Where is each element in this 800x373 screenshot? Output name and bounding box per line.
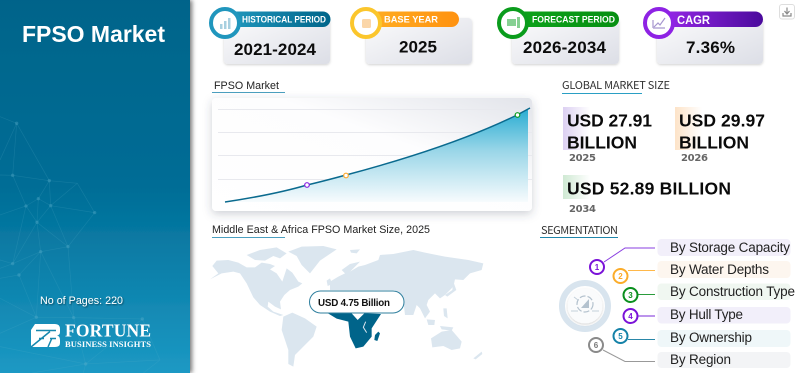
map: world (210, 246, 483, 367)
heading: FPSO Market: FPSO Market (214, 80, 279, 92)
stat: 2034 market size: USD 52.89 BILLION (567, 178, 731, 198)
stat: 2025 market size: 2025 (569, 153, 596, 164)
stat: forecast period: FORECAST PERIOD (532, 14, 615, 26)
stat: base year: 2025 (399, 38, 437, 56)
stat: 2026 market size: BILLION (679, 132, 749, 152)
map highlight: Middle East & Africa (328, 313, 381, 348)
panel: sidebar (0, 0, 190, 373)
stat: 2025 market size: BILLION (567, 132, 637, 152)
segment 2: By Water Depths: 2 (618, 272, 623, 281)
stat: 2034 market size: 2034 (569, 204, 596, 215)
wordmark: BUSINESS INSIGHTS (65, 339, 151, 349)
segment 6: By Region: 6 (594, 341, 599, 350)
trend line (225, 108, 530, 202)
segment 5: By Ownership: 5 (618, 332, 623, 341)
stat: 2034 market size (563, 175, 731, 215)
segment 5: By Ownership: By Ownership (670, 330, 752, 345)
segment 2: By Water Depths (614, 261, 790, 283)
segment 4: By Hull Type (624, 307, 790, 324)
segment 1: By Storage Capacity: By Storage Capacity (670, 240, 790, 255)
wordmark (65, 320, 151, 349)
segment 3: By Construction Type: By Construction Type (670, 284, 795, 299)
segment 3: By Construction Type (624, 284, 795, 302)
data point: 2034 (515, 113, 520, 117)
wordmark: FORTUNE (65, 320, 151, 340)
icon: segmentation hub (562, 283, 608, 329)
stat: CAGR: 7.36% (686, 38, 735, 57)
stat: 2025 market size: USD 27.91 (567, 110, 652, 130)
heading: Middle East & Africa: Middle East & Africa FPSO Market Size, 2025 (212, 224, 430, 236)
segment 6: By Region (589, 338, 790, 368)
area fill (225, 109, 528, 202)
heading: segmentation: SEGMENTATION (541, 222, 618, 238)
icon: FB logo mark (31, 324, 60, 347)
stat: 2025 market size (563, 107, 652, 164)
stat: forecast period: 2026-2034 (523, 38, 607, 57)
segment 1: By Storage Capacity: 1 (595, 263, 600, 272)
segment 4: By Hull Type: By Hull Type (670, 307, 743, 322)
stat: 2026 market size: USD 29.97 (679, 110, 765, 130)
segment 6: By Region: By Region (670, 352, 731, 367)
data point: 2025 (305, 183, 309, 187)
chart: market growth curve (212, 98, 532, 211)
heading: global market size: GLOBAL MARKET SIZE (562, 77, 670, 93)
stat: forecast period (499, 9, 619, 64)
stat: historical period: 2021-2024 (234, 40, 317, 59)
logo: Fortune Business Insights (31, 320, 151, 349)
segment 2: By Water Depths: By Water Depths (670, 262, 769, 277)
stat: base year (352, 9, 472, 64)
title: FPSO Market (22, 21, 165, 47)
stat: CAGR (645, 9, 763, 64)
stat: historical period: HISTORICAL PERIOD (242, 14, 326, 26)
stat: CAGR: CAGR (677, 15, 711, 27)
stat: historical period (211, 9, 330, 64)
page count: No of Pages: 220 (40, 295, 123, 307)
stat: 2026 market size: 2026 (681, 153, 708, 164)
callout: USD 4.75 Billion (310, 291, 404, 313)
segment 5: By Ownership (614, 329, 790, 347)
data point: 2026 (344, 173, 348, 178)
segment 1: By Storage Capacity (590, 239, 790, 274)
stat: 2026 market size (675, 107, 765, 164)
icon: download (780, 4, 794, 19)
segment 3: By Construction Type: 3 (628, 291, 633, 300)
callout: USD 4.75 Billion: USD 4.75 Billion (318, 298, 390, 309)
stat: base year: BASE YEAR (384, 14, 438, 26)
segment 4: By Hull Type: 4 (628, 312, 633, 321)
